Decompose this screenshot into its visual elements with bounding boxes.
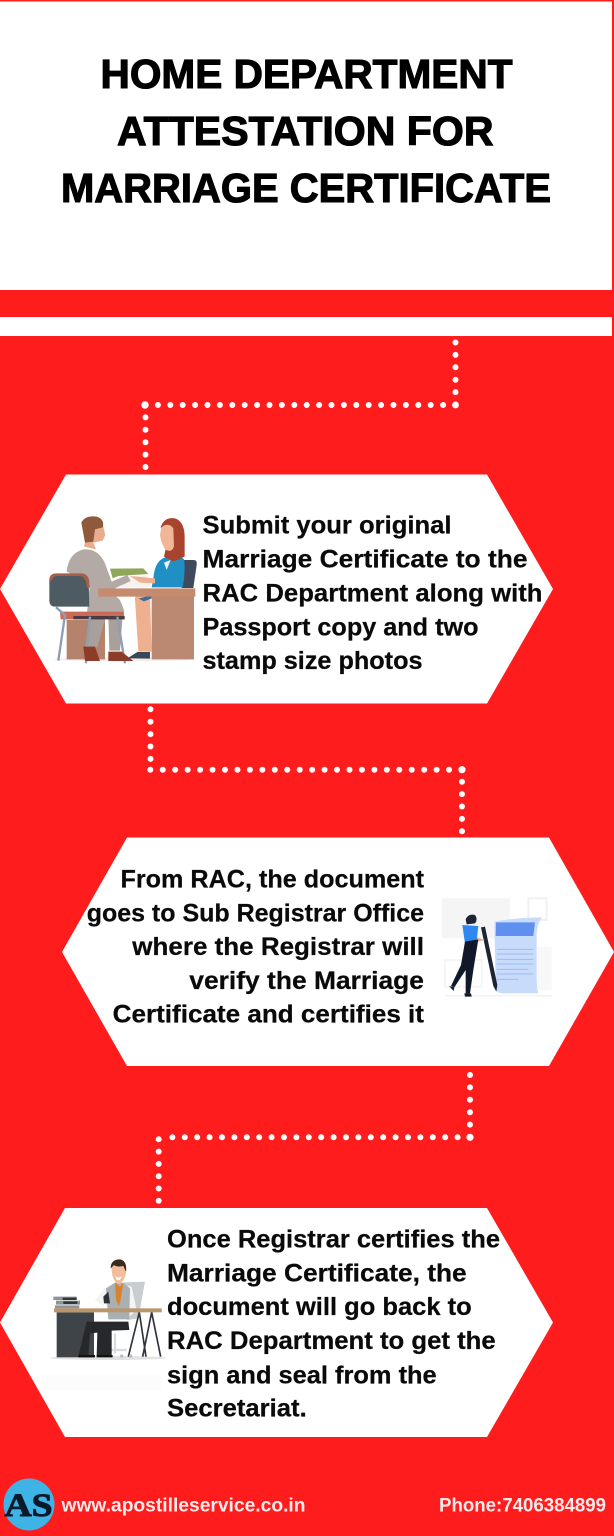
- step 3 text: [167, 1225, 500, 1423]
- step 2 text: verify the Marriage: [189, 967, 424, 995]
- step 2 text: goes to Sub Registrar Office: [87, 899, 424, 927]
- step 2 panel: [62, 838, 614, 1066]
- step 2 text: Certificate and certifies it: [113, 1000, 425, 1028]
- step 1 text: Submit your original: [202, 512, 452, 540]
- title heading: MARRIAGE CERTIFICATE: [61, 165, 551, 211]
- footer phone: Phone:7406384899: [439, 1496, 606, 1517]
- step 1 text: Passport copy and two: [202, 614, 478, 642]
- icon: two people meeting at a desk: [49, 516, 197, 663]
- footer logo: AS: [4, 1488, 52, 1524]
- step 1 text: Marriage Certificate to the: [202, 546, 528, 574]
- step 3 text: Marriage Certificate, the: [167, 1260, 467, 1288]
- dotted connector 1: [141, 342, 459, 467]
- step 2 text: where the Registrar will: [131, 933, 424, 961]
- title heading: HOME DEPARTMENT: [100, 51, 512, 97]
- step 3 panel: [0, 1208, 553, 1437]
- icon: woman with giant pen and document: [442, 898, 552, 997]
- step 3 text: sign and seal from the: [167, 1361, 437, 1389]
- white divider band: [0, 317, 612, 336]
- step 1 text: stamp size photos: [202, 647, 422, 675]
- step 3 text: RAC Department to get the: [167, 1327, 496, 1355]
- footer website: www.apostilleservice.co.in: [60, 1496, 306, 1517]
- title heading: ATTESTATION FOR: [117, 108, 494, 154]
- dotted connector 3: [159, 1075, 474, 1201]
- step 3 text: document will go back to: [167, 1293, 472, 1321]
- step 3 text: Once Registrar certifies the: [167, 1225, 500, 1253]
- step 2 text: From RAC, the document: [120, 866, 425, 894]
- icon: businessman at desk: [42, 1259, 167, 1390]
- title panel: [0, 2, 612, 290]
- footer logo: [4, 1478, 54, 1530]
- dotted connector 2: [150, 709, 466, 832]
- title heading: [61, 51, 551, 211]
- step 1 text: [202, 512, 542, 675]
- step 1 text: RAC Department along with: [202, 580, 542, 608]
- step 3 text: Secretariat.: [167, 1395, 307, 1423]
- step 2 text: [87, 866, 425, 1028]
- step 1 panel: [0, 474, 553, 704]
